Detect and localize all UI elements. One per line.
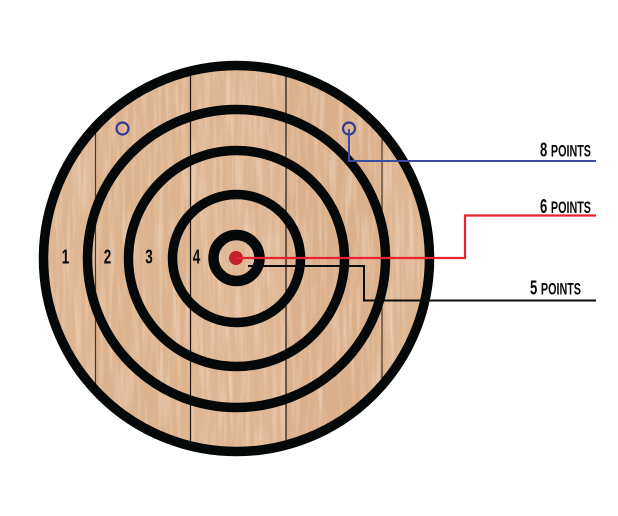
left blue kill-shot circle bbox=[116, 122, 128, 134]
8 points label: 8 POINTS bbox=[540, 140, 591, 162]
target rings bbox=[44, 66, 430, 452]
ring numbers: 2 bbox=[104, 246, 111, 268]
5 points leader line bbox=[248, 266, 596, 300]
right blue kill-shot circle bbox=[343, 122, 355, 134]
6 points label: 6 POINTS bbox=[540, 196, 591, 218]
ring numbers: 3 bbox=[145, 246, 153, 268]
wood board bbox=[39, 60, 435, 458]
plank seams bbox=[96, 60, 382, 458]
5 points label: 5 POINTS bbox=[530, 278, 581, 300]
axe throwing target infographic bbox=[38, 60, 596, 456]
ring numbers: 4 bbox=[193, 246, 201, 268]
8 points leader line bbox=[349, 129, 596, 161]
ring numbers: 1 bbox=[62, 246, 69, 268]
bullseye bbox=[229, 251, 243, 265]
6 points leader line bbox=[236, 216, 596, 258]
ring numbers bbox=[62, 246, 201, 268]
